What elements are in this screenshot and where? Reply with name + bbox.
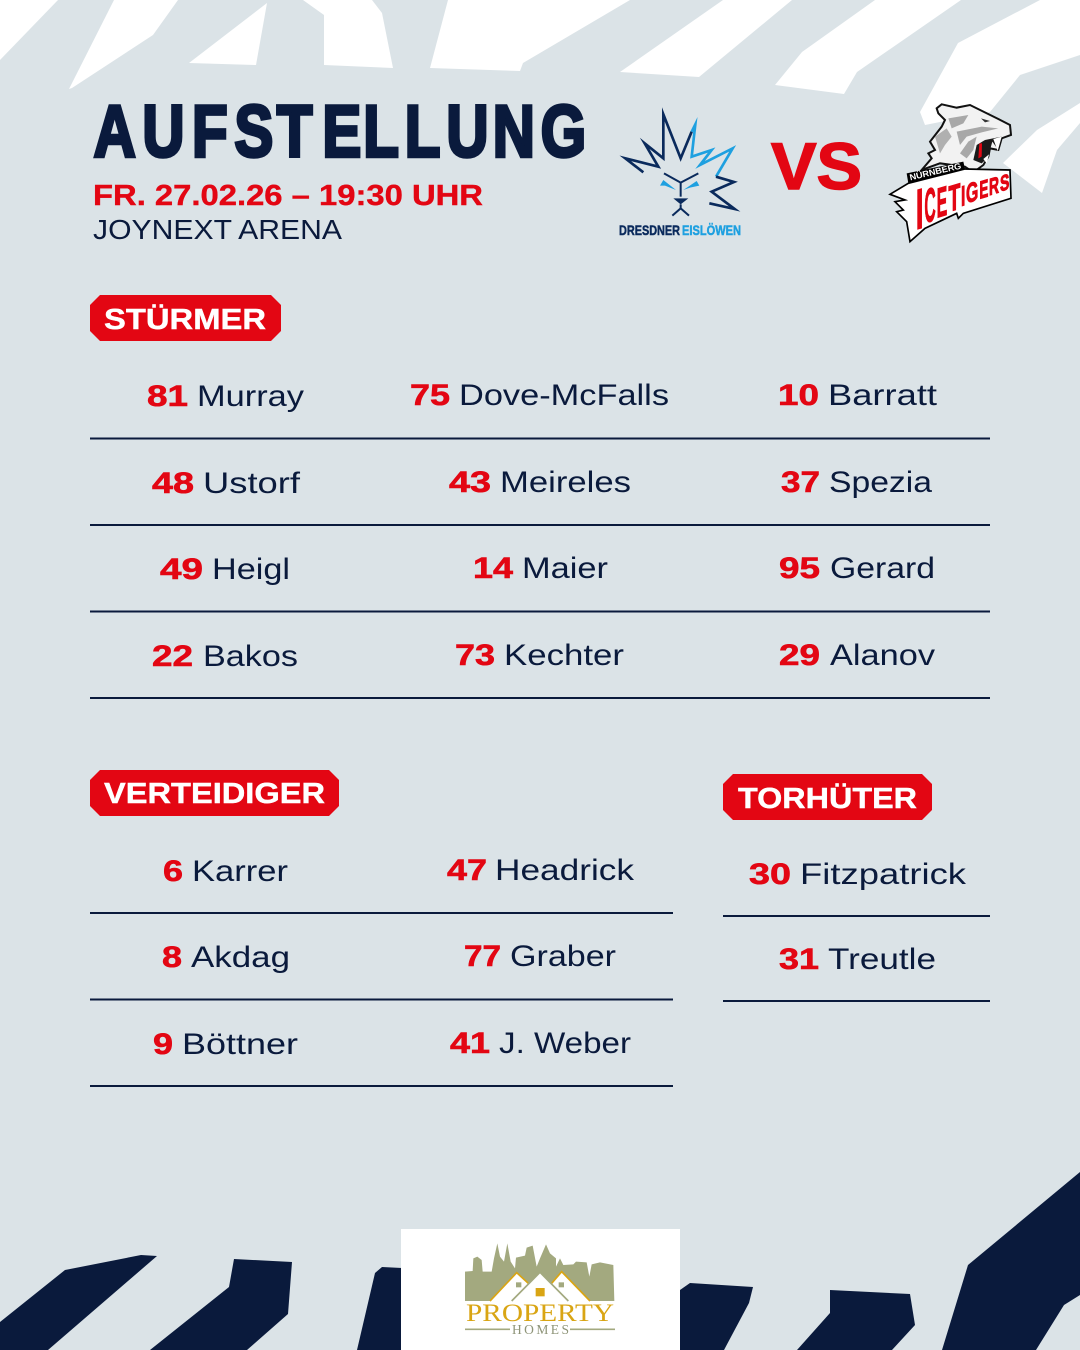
top white stripe pattern (0, 0, 1080, 193)
row 1: Headrick (495, 854, 635, 887)
row 1: Murray (197, 380, 304, 413)
row 4: Alanov (830, 639, 935, 672)
badge: stürmer: STÜRMER (104, 303, 266, 336)
panel: verteidiger (90, 770, 673, 1086)
logo: Property Homes: PROPERTY (466, 1298, 614, 1327)
logo: Nürnberg Ice Tigers: I (961, 180, 965, 213)
logo: Nürnberg Ice Tigers: E (937, 177, 947, 228)
row 2: Meireles (500, 466, 631, 499)
bottom navy stripe pattern (0, 1172, 1080, 1350)
row 1: 30 (749, 858, 791, 891)
row 3: Böttner (182, 1028, 298, 1061)
row 2: 43 (449, 466, 491, 499)
versus label: VS (771, 129, 862, 203)
row 3: Heigl (212, 553, 290, 586)
title: AUFSTELLUNG (94, 91, 586, 173)
venue: JOYNEXT ARENA (93, 214, 342, 245)
row 3 (90, 1027, 673, 1086)
row 2: 8 (162, 941, 182, 974)
logo: Nürnberg Ice Tigers: NÜRNBERG (909, 161, 962, 182)
row 1 (723, 858, 990, 916)
row 3: Gerard (830, 552, 935, 585)
row 2: 77 (464, 940, 501, 973)
logo: Dresdner Eislöwen (619, 114, 741, 238)
row 2: 37 (781, 466, 820, 499)
row 4: Kechter (504, 639, 624, 672)
badge: torhüter (723, 774, 932, 820)
badge: torhüter: TORHÜTER (738, 782, 917, 815)
row 3: 95 (779, 552, 820, 585)
panel: stürmer (90, 295, 990, 698)
row 1 (90, 854, 673, 913)
row 2: 31 (779, 943, 819, 976)
logo: Nürnberg Ice Tigers (890, 104, 1011, 243)
row 2: 48 (152, 467, 194, 500)
row 3: Maier (522, 552, 608, 585)
row 1: 47 (447, 854, 487, 887)
sponsor panel (401, 1229, 680, 1350)
row 2 (723, 943, 990, 1001)
logo: Dresdner Eislöwen: DRESDNER (619, 222, 680, 238)
date and time: FR. 27.02.26 – 19:30 UHR (93, 180, 483, 212)
row 1: Karrer (192, 855, 288, 888)
badge: verteidiger (90, 770, 339, 816)
row 2 (90, 940, 673, 1000)
logo: Property Homes (465, 1243, 615, 1337)
row 4: 29 (779, 639, 820, 672)
row 1: Dove-McFalls (459, 379, 669, 412)
row 1: Barratt (828, 379, 938, 412)
row 4: 73 (455, 639, 495, 672)
row 4: Bakos (203, 640, 298, 673)
row 3: 41 (450, 1027, 490, 1060)
row 3: J. Weber (499, 1027, 631, 1060)
logo: Nürnberg Ice Tigers: I (916, 177, 924, 243)
logo: Nürnberg Ice Tigers: C (924, 178, 936, 234)
logo: Nürnberg Ice Tigers: S (1000, 169, 1009, 196)
row 1: 10 (778, 379, 819, 412)
logo: Dresdner Eislöwen: EISLÖWEN (682, 222, 741, 238)
logo: Nürnberg Ice Tigers: G (966, 175, 978, 209)
row 2: Ustorf (203, 467, 301, 500)
row 2 (90, 466, 990, 525)
row 1: 75 (410, 379, 450, 412)
row 4: 22 (152, 640, 193, 673)
row 1: Fitzpatrick (800, 858, 967, 891)
row 2: Akdag (191, 941, 290, 974)
row 3: 49 (160, 553, 203, 586)
badge: verteidiger: VERTEIDIGER (104, 778, 325, 810)
row 2: Treutle (828, 943, 936, 976)
row 1: 81 (147, 380, 188, 413)
logo: Property Homes: HOMES (512, 1322, 569, 1337)
row 1: 6 (163, 855, 183, 888)
row 1 (90, 379, 990, 438)
row 4 (90, 639, 990, 698)
row 3 (90, 552, 990, 612)
row 2: Graber (510, 940, 616, 973)
logo: Nürnberg Ice Tigers: R (989, 172, 999, 201)
row 3: 14 (473, 552, 513, 585)
row 3: 9 (153, 1028, 173, 1061)
panel: torhüter (723, 774, 990, 1001)
badge: stürmer (90, 295, 281, 341)
logo: Nürnberg Ice Tigers: E (979, 175, 988, 205)
row 2: Spezia (829, 466, 932, 499)
logo: Nürnberg Ice Tigers: T (948, 175, 960, 220)
